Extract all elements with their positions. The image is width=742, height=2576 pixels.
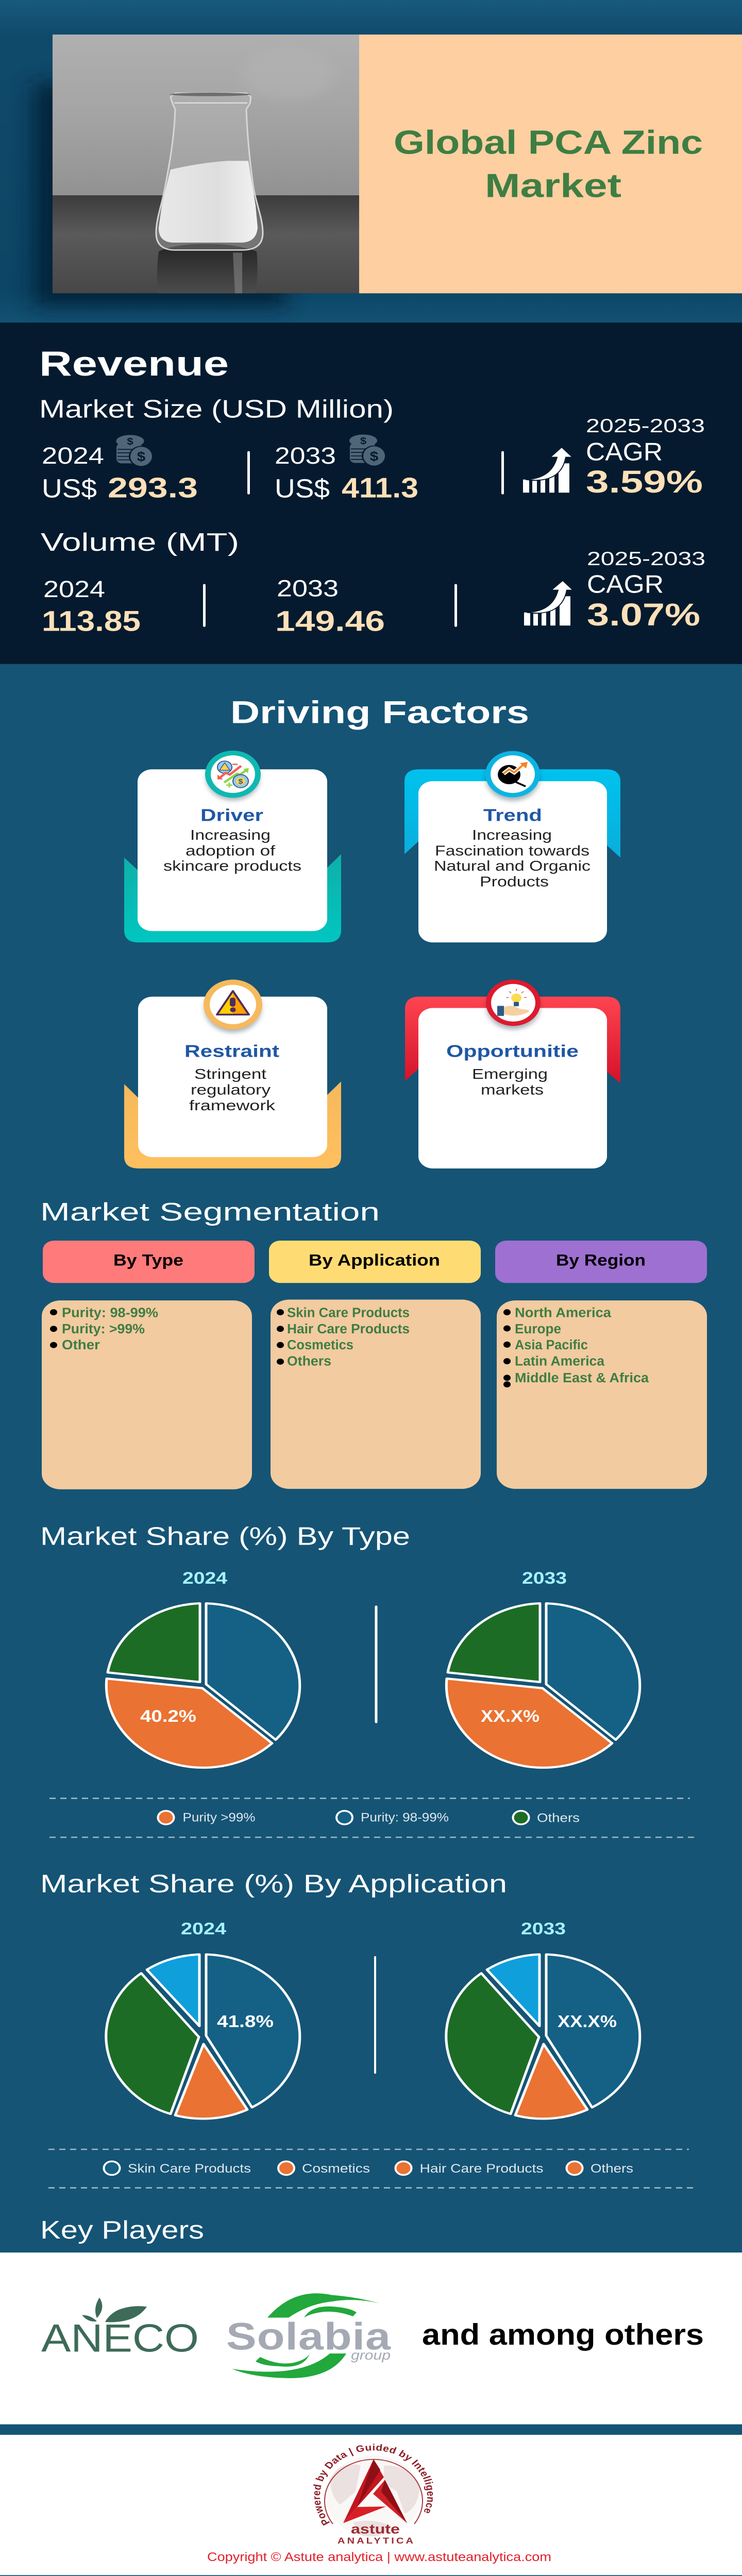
year label 2024: 2024 [181,1920,226,1938]
segment list: region: Middle East & Africa [515,1370,649,1385]
heading: revenue: Revenue [39,344,229,383]
segment header: by region: By Region [556,1251,646,1269]
segment list: region: Latin America [515,1354,605,1369]
icon: driver arrows and gears: $ [239,778,243,786]
text: restraint description: Stringent [194,1066,267,1082]
value: 2033 market size: US$ [275,474,330,503]
panel: key players logos [0,2252,742,2425]
data label 41.8%: 41.8% [217,2012,274,2031]
text: opportunity description: Emerging [472,1066,548,1082]
heading: trend: Trend [483,805,542,825]
text: driver description [163,827,301,874]
text: trend description: Fascination towards [435,843,589,859]
heading: volume: Volume (MT) [41,528,239,556]
text: opportunity description: markets [481,1082,544,1098]
cagr: market size: CAGR [586,438,663,466]
logo: ANECO [41,2298,199,2360]
legend: type: Purity: 98-99% [361,1810,449,1824]
logo: ANECO: ANECO [41,2316,199,2360]
panel: footer [0,2435,742,2575]
legend: application: Hair Care Products [420,2161,544,2175]
value: 2033 volume: 2033 [277,575,339,601]
heading: market segmentation: Market Segmentation [40,1198,380,1226]
legend: application: Skin Care Products [128,2161,251,2175]
divider [454,584,457,627]
segment list: region: Europe [515,1321,561,1336]
cagr: volume: CAGR [587,570,664,598]
text: trend description: Products [480,874,549,890]
pie chart: type 2033 [446,1603,640,1768]
segment list: region [497,1300,707,1489]
text: and among others: and among others [422,2318,704,2351]
segment list: application: Cosmetics [287,1337,353,1353]
pie divider [375,1605,377,1723]
logo: Astute Analytica: ANALYTICA [338,2536,413,2546]
title: Global PCA Zinc [394,124,703,161]
text: opportunity description [472,1066,548,1098]
icon: growth arrow [523,447,572,493]
value: 2024 market size [42,443,198,503]
value: 2033 volume [275,575,385,637]
text: restraint description [189,1066,276,1114]
segment header: by region [495,1241,707,1283]
card: trend [404,751,620,942]
title: Market [485,167,621,204]
text: trend description: Increasing [472,827,552,843]
icon: warning triangle [217,991,249,1014]
value: 2024 market size: 293.3 [108,472,198,503]
heading: market share by application: Market Share (%) By Application [40,1870,507,1898]
legend: type [49,1799,694,1837]
heading: restraint: Restraint [184,1041,279,1061]
value: 2024 volume: 2024 [43,576,105,602]
text: copyright: Copyright © Astute analytica | www.astuteanalytica.com [207,2550,551,2564]
segment header: by type [43,1241,255,1283]
hero photo: glass bottle of white powder [53,35,359,293]
segment list: application: Skin Care Products [287,1306,410,1320]
cagr: volume: 2025-2033 [587,548,705,569]
logo: Astute Analytica: astute [351,2522,400,2536]
icon: coins 2033: $ [370,449,379,464]
icon: coins 2024: $ [137,449,146,464]
segment list: application [271,1299,481,1489]
value: 2033 volume: 149.46 [275,605,385,637]
heading: key players: Key Players [40,2216,204,2244]
cagr: market size: 2025-2033 [586,415,705,436]
icon: hand holding light bulb [497,989,529,1016]
segment list: region: Asia Pacific [515,1337,588,1353]
segment header: by application: By Application [309,1251,440,1269]
text: trend description [434,827,591,890]
logo: Solabia group: group [351,2348,391,2363]
card: driver [124,751,341,942]
data label XX.X%: XX.X% [558,2012,617,2031]
card: opportunity [405,979,620,1168]
text: restraint description: regulatory [191,1082,271,1098]
segment header: by application [269,1241,481,1283]
value: 2033 market size: 2033 [275,443,336,469]
cagr: volume [587,548,705,633]
legend: type: Purity >99% [182,1810,256,1824]
value: 2024 market size: US$ [42,474,97,503]
icon: growth arrow [524,581,573,625]
hero section [0,31,742,320]
segment list: type [42,1300,252,1489]
segment list: type: Purity: 98-99% [62,1306,158,1320]
panel: revenue [0,323,742,664]
text: driver description: adoption of [185,843,276,859]
divider [247,451,250,495]
icon: coins 2024: $ [127,436,133,447]
year label 2024: 2024 [182,1569,227,1587]
text: trend description: Natural and Organic [434,858,591,874]
legend: application: Cosmetics [302,2161,370,2175]
heading: opportunity: Opportunitie [446,1041,579,1061]
data label XX.X%: XX.X% [481,1707,539,1725]
legend: type: Others [537,1810,580,1825]
title [394,124,703,204]
segment list: application: Hair Care Products [287,1321,410,1336]
segment list: type: Purity: >99% [62,1321,145,1336]
segment list: region: North America [515,1306,612,1320]
heading: driver: Driver [200,805,263,825]
title panel [359,35,742,293]
value: 2024 market size: 2024 [42,443,104,469]
year label 2033: 2033 [522,1569,567,1587]
segment header: by type: By Type [113,1251,183,1269]
heading: market share by type: Market Share (%) By Type [40,1522,410,1550]
divider [501,451,504,495]
icon: coins 2033 [349,434,386,466]
icon: driver arrows and gears [217,761,249,788]
logo: Solabia group [226,2293,391,2378]
text: restraint description: framework [189,1097,276,1114]
value: 2024 volume: 113.85 [42,605,141,637]
heading: driving factors: Driving Factors [230,695,529,730]
pie chart: application 2033 [446,1954,640,2119]
value: 2024 volume [42,576,141,637]
pie divider [374,1956,376,2074]
value: 2033 market size [275,443,418,503]
pie chart: type 2024 [106,1603,300,1768]
icon: trend magnifier [498,762,528,786]
cagr: market size: 3.59% [586,465,703,500]
cagr: volume: 3.07% [587,598,700,633]
icon: coins 2024 [116,435,154,467]
data label 40.2%: 40.2% [140,1707,196,1725]
value: 2033 market size: 411.3 [342,472,418,503]
divider [203,584,206,627]
icon: coins 2033: $ [360,436,367,447]
segment list: type: Other [62,1337,100,1353]
legend: application: Others [591,2161,633,2175]
legend: application [48,2149,694,2188]
segment list: application: Others [287,1354,331,1369]
card: restraint [124,979,341,1168]
year label 2033: 2033 [521,1920,566,1938]
cagr: market size [586,415,705,500]
text: driver description: Increasing [190,827,271,843]
pie chart: application 2024 [106,1954,300,2119]
heading: market size: Market Size (USD Million) [39,395,394,423]
logo: Astute Analytica: Powered by Data | Guided by Intelligence [313,2444,433,2526]
text: driver description: skincare products [163,858,301,874]
logo: Solabia group: Solabia [226,2315,391,2358]
